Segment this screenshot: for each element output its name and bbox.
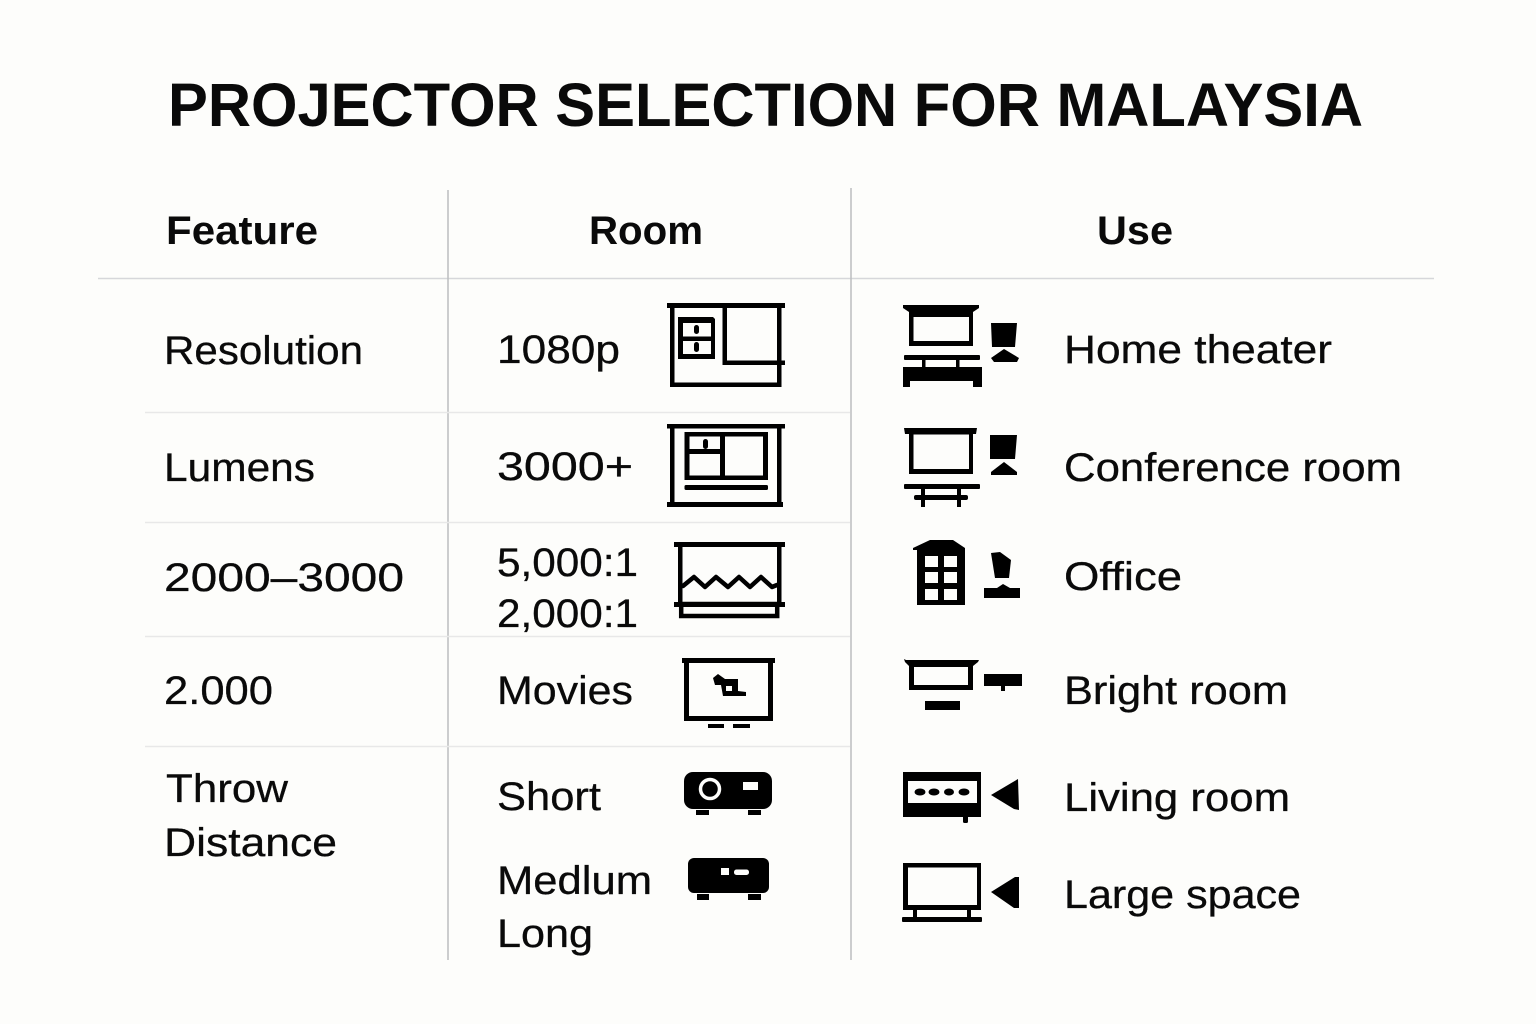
- value: 1080p: 1080p: [497, 328, 620, 372]
- icon: medium-throw projector: [688, 858, 769, 900]
- value: 3000+: 3000+: [497, 445, 633, 489]
- label: Living room: Living room: [1064, 776, 1290, 820]
- table header row: [166, 209, 1173, 253]
- heading: Room: Room: [589, 209, 703, 253]
- label: Large space: Large space: [1064, 873, 1301, 917]
- value: Medlum Long: [497, 859, 652, 956]
- column: Use labels: [1064, 328, 1402, 917]
- label: Throw Distance: [164, 767, 337, 865]
- icon: room with water wave: [674, 542, 785, 616]
- icon: conference screen and seat: [904, 428, 1017, 507]
- icon: home theater screen and seat: [903, 305, 1019, 387]
- label: 2.000: 2.000: [164, 669, 273, 713]
- value: Medlum Long: Medlum: [497, 859, 652, 903]
- column: Feature labels: [164, 329, 404, 865]
- value: contrast ratios: 5,000:1: [497, 541, 638, 585]
- label: Conference room: Conference room: [1064, 446, 1402, 490]
- label: Throw Distance: Distance: [164, 821, 337, 865]
- value: Short: Short: [497, 775, 601, 819]
- value: Medlum Long: Long: [497, 912, 593, 956]
- column: Room values: [497, 328, 652, 956]
- heading: Feature: Feature: [166, 209, 318, 253]
- value: contrast ratios: 2,000:1: [497, 592, 638, 636]
- icon: bright room screen and bar: [904, 659, 1022, 710]
- value: contrast ratios: [497, 541, 638, 636]
- label: Home theater: Home theater: [1064, 328, 1332, 372]
- heading: Use: Use: [1097, 209, 1173, 253]
- value: Movies: Movies: [497, 669, 633, 713]
- label: Lumens: Lumens: [164, 446, 315, 490]
- label: Office: Office: [1064, 555, 1182, 599]
- label: 2000–3000: 2000–3000: [164, 556, 404, 600]
- title: PROJECTOR SELECTION FOR MALAYSIA: [168, 71, 1363, 139]
- icon: office building and person: [913, 540, 1020, 605]
- label: Resolution: Resolution: [164, 329, 363, 373]
- label: Bright room: Bright room: [1064, 669, 1288, 713]
- icon: large space screen and speaker: [902, 863, 1019, 922]
- icon: movie screen: [682, 658, 775, 728]
- icon: room with cabinet: [667, 303, 785, 387]
- icon: short-throw projector: [684, 772, 772, 815]
- label: Throw Distance: Throw: [166, 767, 288, 811]
- icon: living room display and speaker: [903, 772, 1019, 823]
- icon: room with window and shelf: [667, 424, 785, 507]
